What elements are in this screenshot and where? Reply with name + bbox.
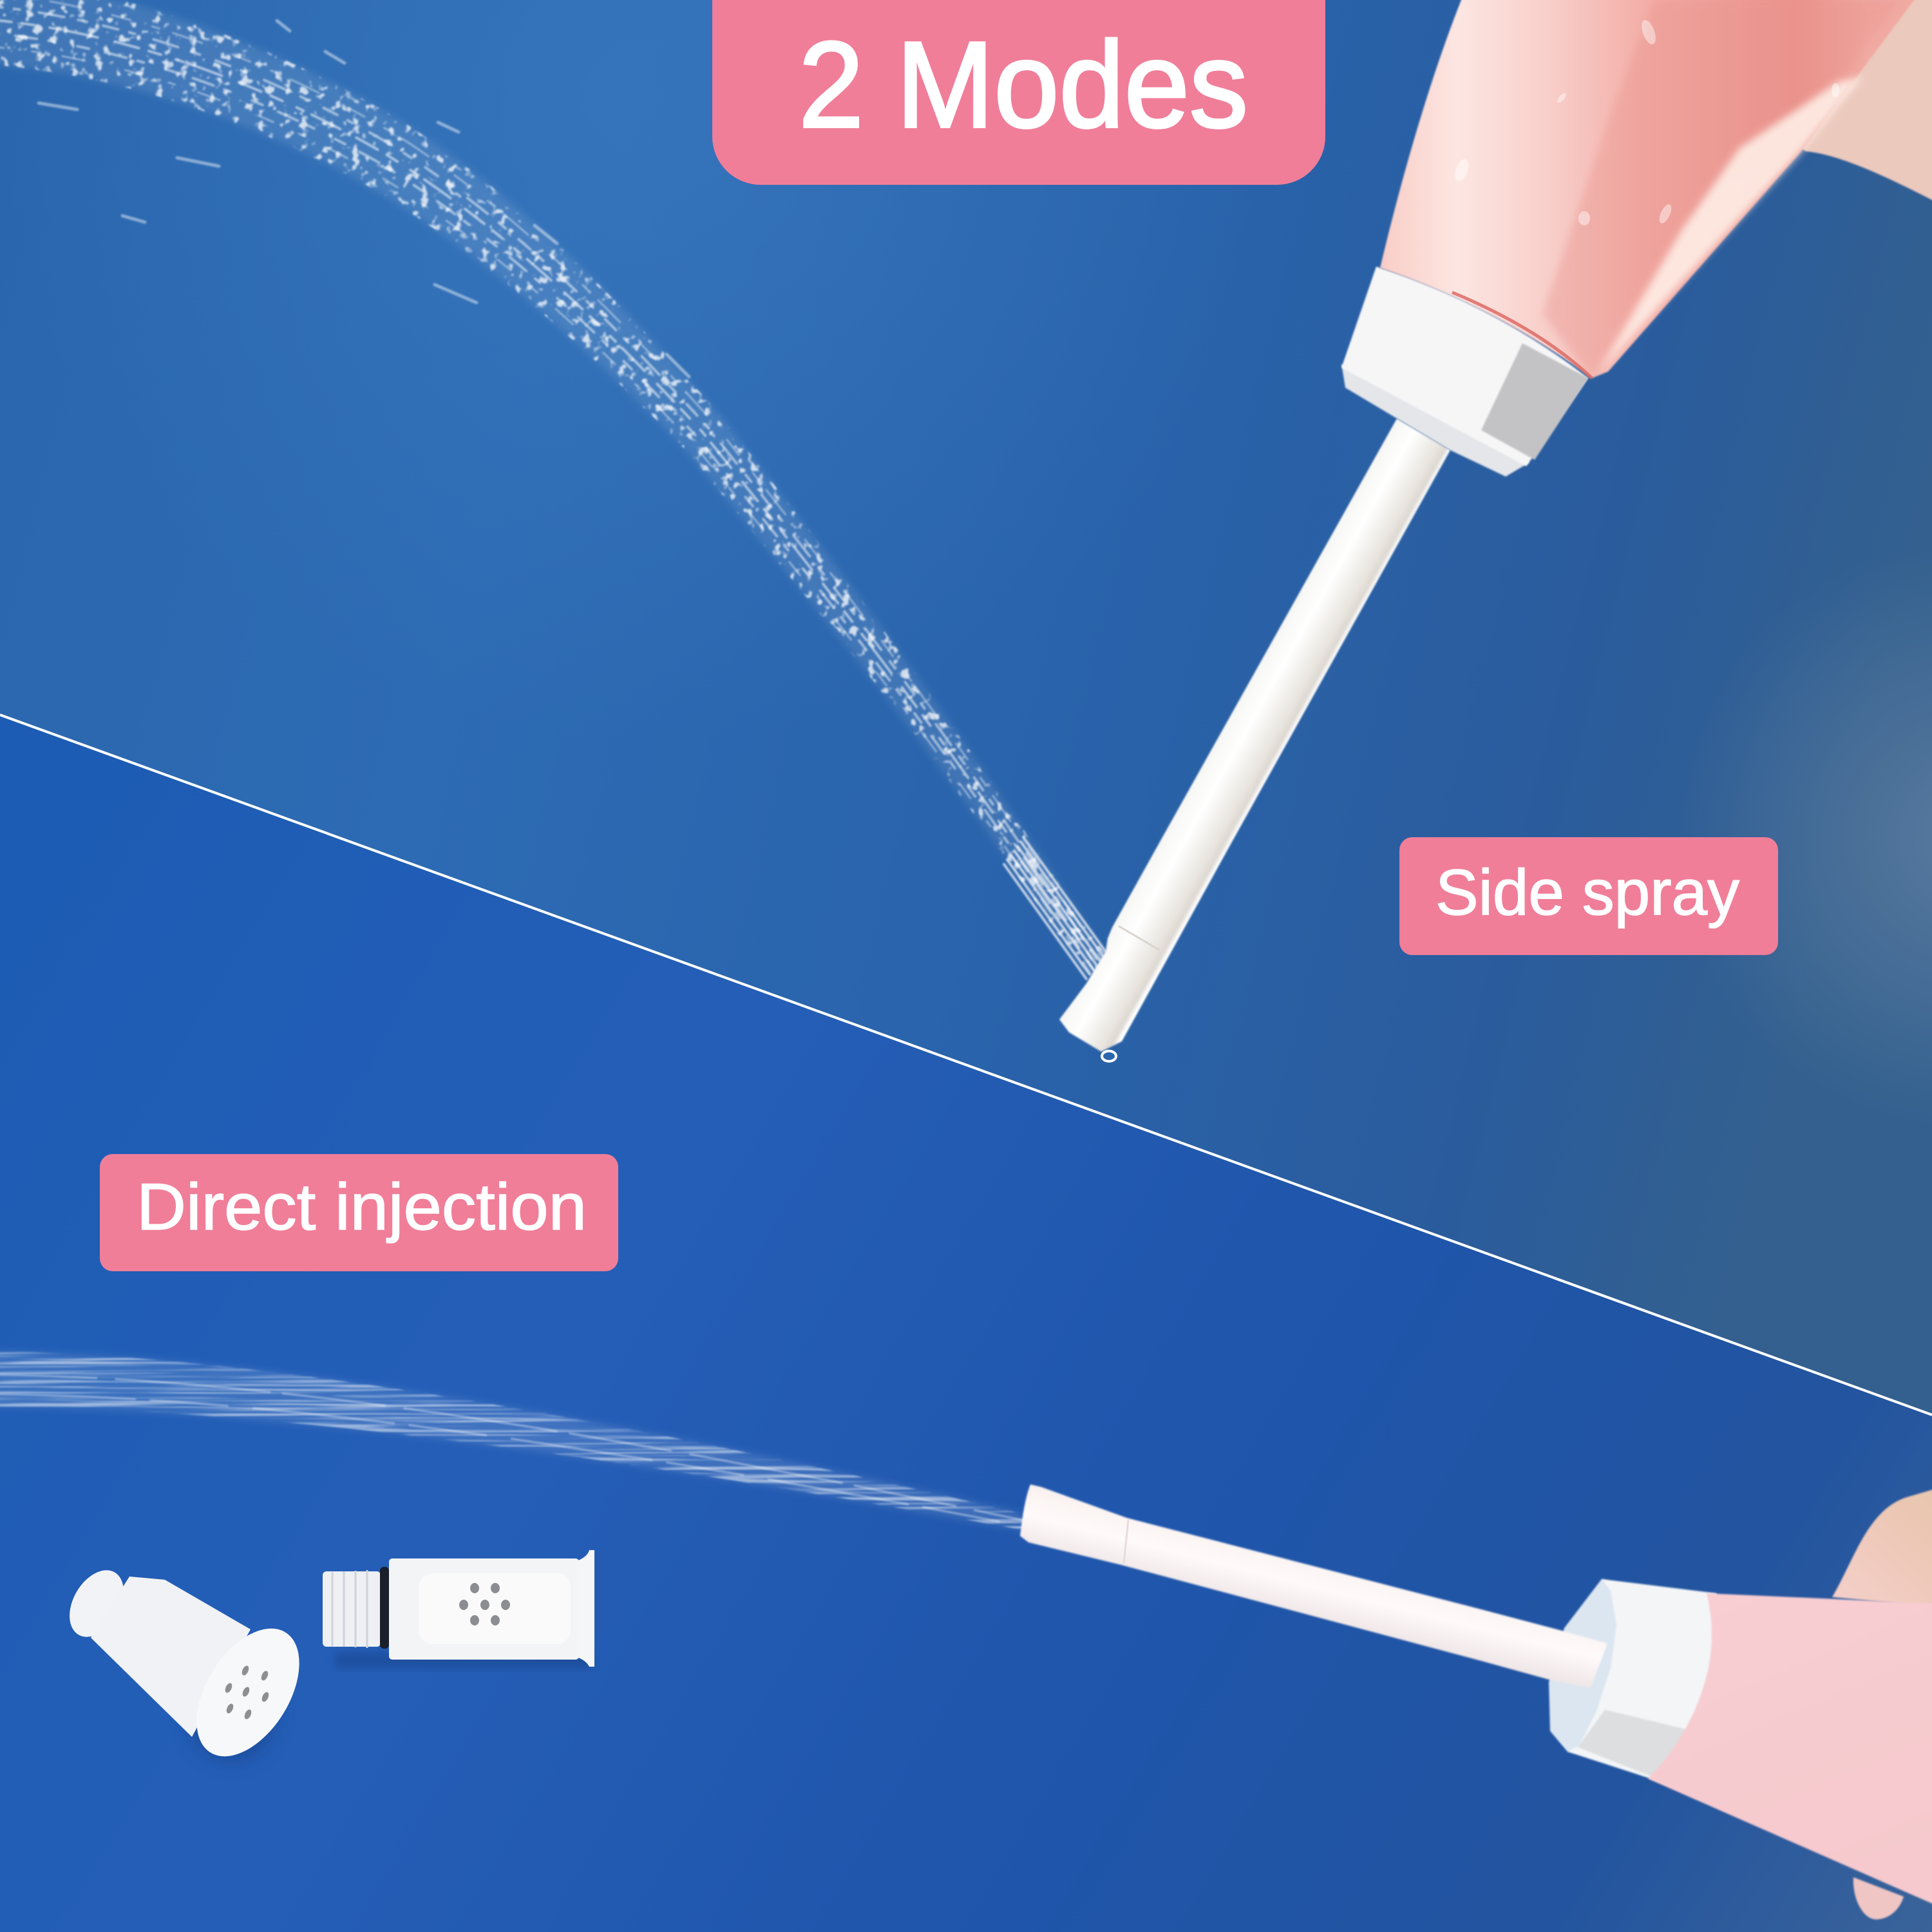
bottle highlight strip xyxy=(1600,76,1863,371)
top finger xyxy=(1832,1489,1932,1607)
bottle body xyxy=(1648,1593,1932,1905)
flare xyxy=(576,1550,594,1667)
title badge: 2 Modes xyxy=(799,17,1248,153)
seal line xyxy=(1452,292,1592,378)
panel: direct injection background xyxy=(0,715,1932,1932)
label: side spray xyxy=(1399,837,1778,955)
nozzle water drop xyxy=(1102,1051,1116,1061)
nozzle joint line xyxy=(1119,926,1159,950)
cap xyxy=(1341,267,1588,466)
cap xyxy=(1567,1579,1721,1783)
recessed panel xyxy=(419,1573,571,1644)
product: bottom bottle with direct-injection nozzle xyxy=(1020,1484,1932,1919)
nozzle joint line xyxy=(1124,1520,1128,1564)
bottom finger xyxy=(1853,1877,1904,1919)
bottle shaded facet xyxy=(1542,0,1900,378)
cap grey facet xyxy=(1578,1710,1694,1780)
cap grey facet xyxy=(1481,343,1588,460)
attachment: side-spray head, angled xyxy=(59,1561,321,1774)
label: direct injection: Direct injection xyxy=(137,1170,587,1244)
label: side spray: Side spray xyxy=(1435,857,1739,929)
cap inner bowl xyxy=(1549,1579,1627,1752)
label: direct injection xyxy=(100,1154,618,1271)
threaded connector xyxy=(323,1571,381,1647)
title badge xyxy=(712,0,1325,185)
water droplets on bottle xyxy=(1452,18,1839,225)
cap lower lip xyxy=(1341,364,1530,477)
spray holes xyxy=(224,1665,270,1720)
connector nub xyxy=(59,1561,135,1646)
attachment: direct-injection head, side view xyxy=(323,1550,594,1669)
body xyxy=(91,1577,251,1737)
end cap xyxy=(175,1611,321,1774)
black o-ring xyxy=(380,1567,389,1649)
water spray: direct injection stream xyxy=(0,1351,1024,1530)
hand holding top bottle xyxy=(1797,0,1932,202)
nozzle tube xyxy=(1059,419,1450,1052)
spray holes xyxy=(459,1583,510,1625)
body xyxy=(389,1558,579,1660)
product: top bottle pointing down with side-spray nozzle xyxy=(1059,0,1932,1061)
water spray: side spray arc xyxy=(0,0,1110,979)
nozzle tube xyxy=(1020,1484,1607,1688)
diagonal divider line xyxy=(0,715,1932,1415)
bottle body xyxy=(1380,0,1917,378)
